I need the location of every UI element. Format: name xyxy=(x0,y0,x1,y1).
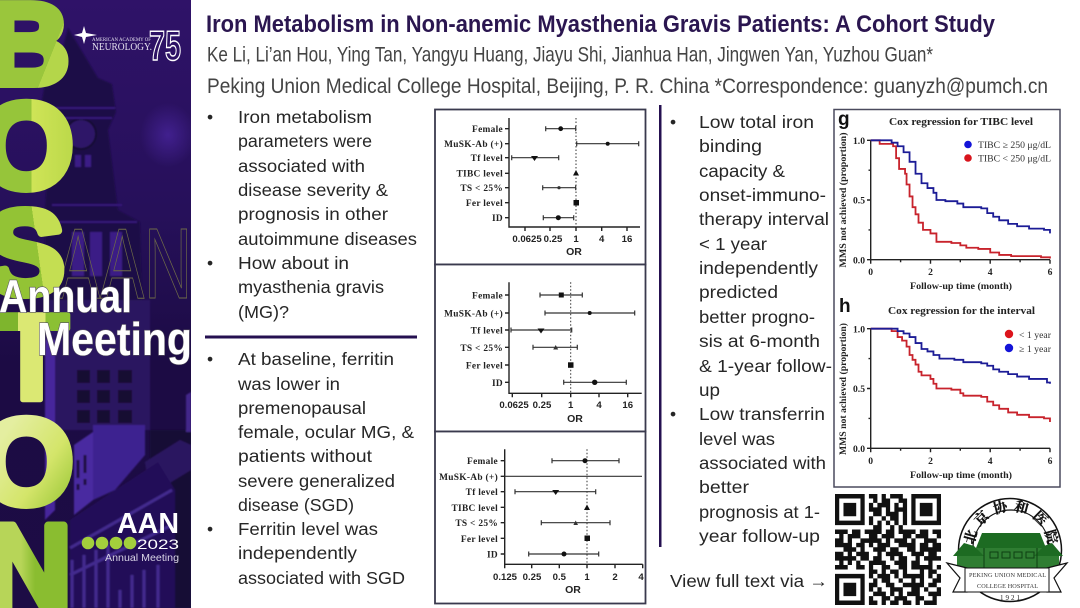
panel: forest plot 1: TS < 25% xyxy=(460,184,503,194)
chart h: interval: 6 xyxy=(1048,456,1053,467)
panel: forest plot 1: Tf level xyxy=(471,154,503,164)
text block: prognosis findings: associated with xyxy=(699,453,826,473)
chart h: interval: 0 xyxy=(868,456,873,467)
text block: background questions xyxy=(207,107,417,322)
divider xyxy=(205,336,417,338)
chart g: TIBC level: MMS not achieved (proportion) xyxy=(838,132,849,268)
text block: ferritin findings: Ferritin level was xyxy=(238,519,378,539)
ribbon xyxy=(947,563,1067,602)
text block: ferritin findings: female, ocular MG, & xyxy=(238,422,414,442)
panel: forest plot 1: ID xyxy=(492,214,503,224)
text block: ferritin findings: independently xyxy=(238,543,357,563)
text block: prognosis findings: better progno- xyxy=(699,307,815,327)
text block: ferritin findings: was lower in xyxy=(237,374,340,394)
chart g: TIBC level xyxy=(838,109,1053,292)
panel: forest plot 1: 16 xyxy=(622,234,632,245)
panel: forest plot 3: 4 xyxy=(638,572,644,583)
vertical divider xyxy=(659,105,662,547)
text block: background questions: Iron metabolism xyxy=(238,107,372,127)
ribbon: 1921 xyxy=(1000,594,1020,602)
text block: background questions: How about in xyxy=(238,253,349,273)
chart h: interval: ≥ 1 year xyxy=(1019,345,1052,355)
panel: forest plot 1 xyxy=(435,110,646,264)
AAN academy logo: NEUROLOGY. xyxy=(92,42,152,53)
panel: forest plot 2: 0.25 xyxy=(533,400,552,411)
panel: forest plot 3: 0.5 xyxy=(553,572,567,583)
Annual Meeting xyxy=(0,270,192,365)
text block: prognosis findings: year follow-up xyxy=(699,526,820,546)
panel: forest plot 1: 0.0625 xyxy=(512,234,542,245)
AAN 2023 logo xyxy=(82,513,178,563)
text block: prognosis findings: predicted xyxy=(699,282,778,302)
text block: prognosis findings: binding xyxy=(699,136,762,156)
text block: prognosis findings: • xyxy=(670,112,676,132)
panel: forest plot 1: MuSK-Ab (+) xyxy=(444,139,503,150)
panel: Kaplan-Meier charts xyxy=(834,109,1060,487)
text block: background questions: prognosis in other xyxy=(238,204,388,224)
text block: ferritin findings: disease (SGD) xyxy=(238,495,354,515)
chart h: interval: MMS not achieved (proportion) xyxy=(838,323,849,455)
panel: forest plot 2: Fer level xyxy=(466,362,503,372)
AAN academy logo: AMERICAN ACADEMY OF xyxy=(92,37,151,43)
AAN 2023 logo: 2023 xyxy=(137,536,179,552)
text block: background questions: • xyxy=(207,253,213,273)
text block: ferritin findings: patients without xyxy=(238,446,372,466)
panel: forest plot 2: 1 xyxy=(568,400,574,411)
chart g: TIBC level: 0.0 xyxy=(853,256,865,266)
text block: prognosis findings: prognosis at 1- xyxy=(699,502,820,522)
panel: forest plot 2: MuSK-Ab (+) xyxy=(444,308,503,320)
tower photo xyxy=(40,28,191,608)
panel: forest plot 3: Tf level xyxy=(466,488,498,498)
ribbon: PEKING UNION MEDICAL xyxy=(969,572,1046,579)
chart h: interval: h xyxy=(839,296,851,317)
panel: forest plot 2: ID xyxy=(492,379,503,389)
building xyxy=(953,533,1063,568)
AAN academy logo xyxy=(74,26,181,62)
outline AAN: AAN xyxy=(56,208,192,320)
chart g: TIBC level: 1.0 xyxy=(853,136,865,147)
AAN academy logo: 75 xyxy=(149,22,181,69)
chart g: TIBC level: 4 xyxy=(988,267,993,278)
panel: forest plot 2: 0.0625 xyxy=(499,400,529,411)
Annual Meeting: Annual xyxy=(0,270,132,322)
text block: prognosis findings: Low total iron xyxy=(699,112,814,132)
panel: forest plot 3: Female xyxy=(467,457,498,467)
Annual Meeting: Meeting xyxy=(37,313,192,365)
chart h: interval: 1.0 xyxy=(853,324,865,336)
view full text label: View full text via → xyxy=(670,571,828,591)
text block: prognosis findings: < 1 year xyxy=(699,234,767,254)
chart g: TIBC level: TIBC < 250 μg/dL xyxy=(978,154,1051,164)
panel: forest plot 3: 2 xyxy=(612,572,618,583)
panel: forest plot 1: 0.25 xyxy=(544,234,563,245)
AAN 2023 logo: Annual Meeting xyxy=(105,552,179,564)
chart g: TIBC level: g xyxy=(838,109,850,130)
panel: forest plot 1: TIBC level xyxy=(456,170,503,180)
text block: prognosis findings: capacity & xyxy=(699,161,785,181)
panel: forest plot 3: OR xyxy=(565,584,581,596)
panel: forest plot 1: 4 xyxy=(599,234,605,245)
panel: forest plot 1: Fer level xyxy=(466,199,503,209)
panel: forest plot 2: Female xyxy=(472,292,503,302)
text block: ferritin findings: associated with SGD xyxy=(238,568,405,588)
text block: ferritin findings: premenopausal xyxy=(238,398,366,418)
title: Iron Metabolism in Non-anemic Myasthenia Gravis Patients: A Cohort Study xyxy=(206,11,996,38)
chart g: TIBC level: 0 xyxy=(868,267,873,278)
panel: forest plot 2: Tf level xyxy=(471,326,503,336)
chart h: interval: 2 xyxy=(928,456,933,467)
panel: forest plot 1: Female xyxy=(472,125,503,135)
text block: prognosis findings: Low transferrin xyxy=(699,404,825,424)
panel: forest plot 3: TIBC level xyxy=(452,504,498,514)
panel: forest plot 2: 16 xyxy=(622,400,633,411)
text block: background questions: disease severity & xyxy=(238,180,388,200)
text block: prognosis findings: • xyxy=(670,404,676,424)
chart g: TIBC level: TIBC ≥ 250 μg/dL xyxy=(978,141,1051,151)
panel: forest plot 2: TS < 25% xyxy=(460,344,503,354)
text block: prognosis findings: onset-immuno- xyxy=(699,185,826,205)
panel: conference sidebar xyxy=(0,0,196,608)
text block: background questions: parameters were xyxy=(238,131,372,151)
chart h: interval: 0.0 xyxy=(853,444,865,455)
ribbon: COLLEGE HOSPITAL xyxy=(977,583,1038,590)
chart h: interval: Follow-up time (month) xyxy=(910,470,1012,481)
text block: prognosis findings: sis at 6-month xyxy=(699,331,820,351)
chart h: interval: < 1 year xyxy=(1019,331,1052,341)
text block: background questions: (MG)? xyxy=(238,302,289,322)
panel: forest plot 1: 1 xyxy=(573,234,579,245)
panel: forest plot 3: Fer level xyxy=(461,535,498,545)
chart h: interval: 0.5 xyxy=(853,384,865,395)
text block: background questions: associated with xyxy=(238,156,365,176)
panel: forest plot 1: OR xyxy=(566,246,582,258)
text block: ferritin findings: • xyxy=(207,519,213,539)
text block: prognosis findings: independently xyxy=(699,258,818,278)
text block: background questions: myasthenia gravis xyxy=(238,277,384,297)
chart g: TIBC level: 2 xyxy=(928,267,933,278)
chart h: interval: 4 xyxy=(988,456,993,467)
text block: prognosis findings: & 1-year follow- xyxy=(699,356,832,376)
panel: forest plot 2 xyxy=(435,264,646,432)
text block: prognosis findings xyxy=(670,112,832,546)
authors: Ke Li, Li’an Hou, Ying Tan, Yangyu Huang, Jiayu Shi, Jianhua Han, Jingwen Yan, Yuzhou Guan* xyxy=(207,44,933,66)
panel: forest plot 3: 1 xyxy=(584,572,590,583)
panel: forest plot 3: MuSK-Ab (+) xyxy=(439,472,498,483)
text block: prognosis findings: therapy interval xyxy=(699,209,829,229)
chart h: interval: Cox regression for the interval xyxy=(888,306,1035,317)
text block: prognosis findings: better xyxy=(699,477,749,497)
icon: Peking Union Medical College Hospital logo: 北京协和医院 xyxy=(964,500,1058,544)
text block: prognosis findings: up xyxy=(699,380,720,400)
chart g: TIBC level: Cox regression for TIBC level xyxy=(889,117,1033,128)
text block: ferritin findings: At baseline, ferritin xyxy=(238,349,394,369)
text block: background questions: autoimmune diseases xyxy=(238,229,417,249)
panel: forest plot 2: OR xyxy=(567,413,583,425)
panel: forest plot 3: 0.125 xyxy=(493,572,518,583)
panel: forest plot 3 xyxy=(435,432,646,604)
panel: forest plot 3: 0.25 xyxy=(523,572,542,583)
icon: Peking Union Medical College Hospital logo xyxy=(945,498,1069,602)
panel: forest plot 3: TS < 25% xyxy=(455,519,498,529)
chart h: interval xyxy=(838,296,1053,481)
panel: forest plot 3: ID xyxy=(487,550,498,560)
chart g: TIBC level: 0.5 xyxy=(853,196,865,206)
chart g: TIBC level: 6 xyxy=(1048,267,1053,278)
text block: background questions: • xyxy=(207,107,213,127)
text block: ferritin findings xyxy=(207,349,414,588)
BOSTON vertical lettering xyxy=(0,0,74,608)
icon: QR code xyxy=(835,494,941,605)
panel: forest plot 2: 4 xyxy=(596,400,602,411)
text block: ferritin findings: • xyxy=(207,349,213,369)
AAN 2023 logo: AAN xyxy=(117,508,179,540)
text block: prognosis findings: level was xyxy=(699,429,775,449)
chart g: TIBC level: Follow-up time (month) xyxy=(910,281,1012,292)
text block: ferritin findings: severe generalized xyxy=(238,471,395,491)
